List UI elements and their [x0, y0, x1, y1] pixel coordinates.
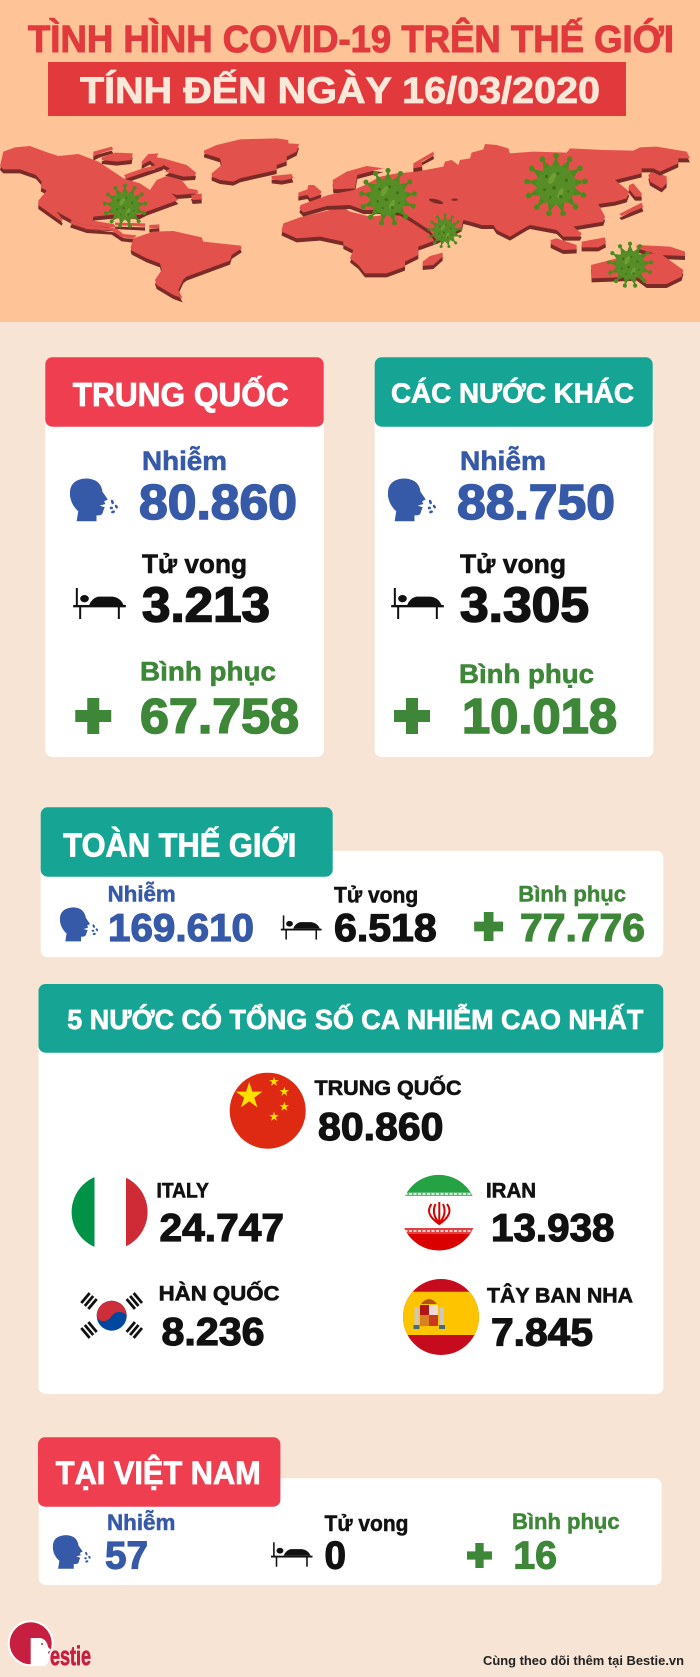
label: deaths: Tử vong	[142, 549, 247, 579]
icon: korea flag	[80, 1292, 143, 1339]
number: deaths: 0	[324, 1534, 346, 1577]
panel: worldwide	[41, 807, 663, 957]
icon: deaths	[271, 1542, 312, 1567]
label: deaths: Tử vong	[324, 1511, 408, 1536]
label: spain: TÂY BAN NHA	[487, 1283, 633, 1307]
icon: infected	[70, 479, 118, 521]
number: infected: 57	[105, 1534, 148, 1577]
icon: deaths	[391, 588, 444, 619]
panel: other countries	[375, 357, 653, 757]
label: infected: Nhiễm	[460, 445, 546, 476]
icon: infected	[53, 1535, 91, 1569]
icon: spain flag	[403, 1279, 479, 1355]
icon: deaths	[73, 588, 126, 619]
label: recovered: Bình phục	[518, 882, 626, 907]
number: deaths: 3.305	[460, 578, 589, 632]
logo: bestie: estie	[50, 1641, 91, 1671]
label: recovered: Bình phục	[512, 1509, 620, 1534]
icon: italy flag	[72, 1177, 148, 1247]
label: recovered: Bình phục	[459, 659, 594, 689]
number: deaths: 6.518	[334, 907, 437, 950]
number: italy: 24.747	[160, 1207, 284, 1250]
panel: top 5 countries	[38, 984, 663, 1394]
icon: recovered	[467, 1543, 492, 1568]
icon: virus middle east	[427, 214, 463, 249]
icon: china flag	[230, 1073, 306, 1149]
world map	[0, 138, 690, 302]
title: TÌNH HÌNH COVID-19 TRÊN THẾ GIỚI	[28, 17, 674, 61]
number: infected: 80.860	[139, 476, 297, 530]
icon: virus north america	[102, 184, 148, 229]
label: infected: Nhiễm	[108, 882, 176, 907]
icon: virus australia	[606, 242, 654, 289]
icon: deaths	[281, 915, 322, 940]
icon: virus europe	[358, 168, 418, 227]
panel: vietnam	[38, 1437, 662, 1585]
date banner	[48, 62, 626, 116]
logo: bestie	[8, 1620, 91, 1674]
label: infected: Nhiễm	[107, 1510, 175, 1535]
number: recovered: 16	[513, 1534, 557, 1577]
icon: recovered	[394, 698, 430, 734]
number: china: 80.860	[318, 1106, 444, 1149]
icon: iran flag	[404, 1174, 474, 1250]
icon: recovered	[474, 912, 503, 941]
label: infected: Nhiễm	[142, 445, 227, 476]
number: spain: 7.845	[491, 1312, 593, 1355]
label: china: TRUNG QUỐC	[314, 1076, 462, 1100]
footer credit: Cùng theo dõi thêm tại Bestie.vn	[483, 1653, 684, 1668]
icon: virus china	[523, 153, 589, 218]
number: recovered: 77.776	[520, 907, 645, 950]
number: korea: 8.236	[162, 1311, 264, 1354]
heading: tai viet nam: TẠI VIỆT NAM	[56, 1455, 261, 1491]
heading: cac nuoc khac: CÁC NƯỚC KHÁC	[391, 378, 634, 409]
icon: recovered	[75, 698, 111, 734]
logo: bestie: B	[31, 1633, 50, 1674]
date banner: TÍNH ĐẾN NGÀY 16/03/2020	[80, 70, 600, 111]
number: deaths: 3.213	[142, 578, 270, 632]
heading: top 5: 5 NƯỚC CÓ TỔNG SỐ CA NHIỄM CAO NHẤT	[67, 1003, 643, 1035]
label: iran: IRAN	[486, 1179, 536, 1202]
number: recovered: 67.758	[140, 690, 299, 744]
label: korea: HÀN QUỐC	[159, 1282, 280, 1306]
number: infected: 169.610	[108, 907, 254, 950]
number: infected: 88.750	[457, 476, 615, 530]
header panel	[0, 0, 700, 322]
label: recovered: Bình phục	[140, 657, 276, 687]
label: italy: ITALY	[156, 1179, 209, 1202]
heading: trung quoc: TRUNG QUỐC	[73, 375, 289, 413]
number: recovered: 10.018	[462, 690, 617, 744]
heading: toan the gioi: TOÀN THẾ GIỚI	[63, 827, 296, 864]
number: iran: 13.938	[491, 1207, 614, 1250]
label: deaths: Tử vong	[334, 882, 418, 907]
panel: china	[45, 357, 324, 757]
label: deaths: Tử vong	[460, 549, 566, 579]
icon: infected	[388, 479, 436, 521]
icon: infected	[60, 907, 99, 941]
